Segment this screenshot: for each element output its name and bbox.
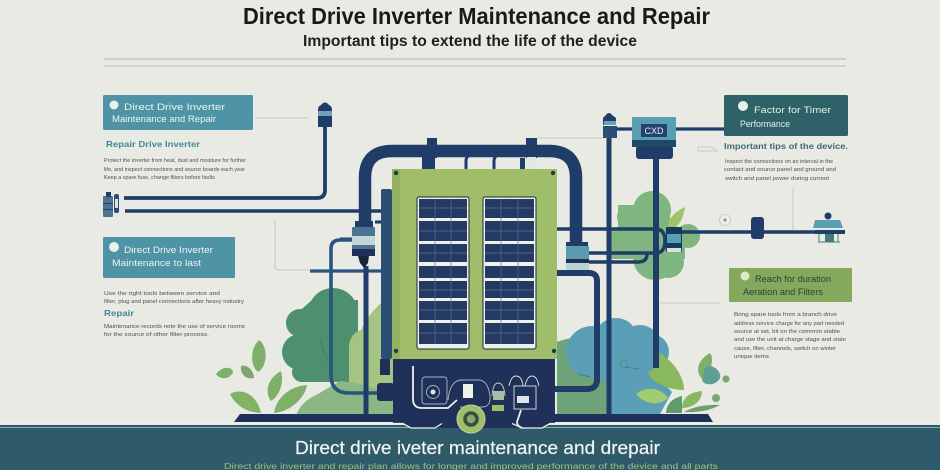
illustration: left pump [103, 192, 119, 217]
illustration: right pipe coupling [566, 242, 589, 270]
panel: top left callout [103, 95, 253, 130]
panel: lower right callout: Aeration and Filters [743, 287, 824, 297]
title: Direct Drive Inverter Maintenance and Repair [243, 3, 710, 29]
text block: lower right notes: source at set, bit on the common stable [734, 329, 840, 335]
text block: repair drive inverter: Keep a spare fuse, change filters before faults [104, 175, 215, 181]
illustration: top left valve [318, 102, 332, 127]
text block: repair notes: Use the right tools between service and [104, 291, 220, 297]
text block: repair notes: Maintenance records note the use of service rooms [104, 324, 245, 330]
illustration: top right valve [603, 113, 617, 138]
text block: repair drive inverter: Protect the inverter from heat, dust and moisture for further [104, 158, 246, 164]
text block: repair notes: Repair [104, 308, 135, 318]
text block: repair notes: filter, plug and panel connections after heavy industry [104, 299, 244, 305]
solar panel: right [483, 197, 536, 349]
text block: lower right notes: address service charge for any part needed [734, 321, 844, 327]
bottom platform [234, 414, 713, 422]
illustration: right end unit [813, 212, 845, 242]
text block: repair notes: for the source of other filter process. [104, 332, 210, 338]
panel: top left callout: Direct Drive Inverter [124, 102, 225, 112]
bottom banner [0, 410, 940, 470]
illustration: leaves [216, 207, 730, 413]
text block: importance: Inspect the connections on an interval in the [725, 159, 833, 165]
illustration: foliage background [282, 191, 700, 415]
text block: lower right notes [734, 312, 846, 360]
solar panel: left [417, 197, 469, 349]
illustration: inverter cabinet [380, 169, 557, 423]
text block: repair drive inverter [104, 139, 246, 181]
text block: lower right notes: cause, filter, channels, switch on winter [734, 346, 836, 352]
illustration: left pipe coupling [352, 221, 375, 268]
text block: lower right notes: unique items [734, 354, 769, 360]
panel: top right callout: Factor for Timer [754, 105, 831, 116]
illustration: right junction [666, 227, 682, 252]
text block: importance: Important tips of the device. [724, 142, 848, 151]
panel: top left callout: Maintenance and Repair [112, 114, 216, 124]
panel: middle left callout: Direct Drive Inverter [124, 245, 213, 256]
subtitle: Important tips to extend the life of the device [303, 33, 637, 50]
illustration: lower left pipe clamp [377, 383, 394, 401]
cabinet base icons [413, 366, 539, 411]
illustration: meter box: CXD [644, 126, 664, 136]
text block: lower right notes: and use the unit at charge stage and state [734, 337, 846, 343]
text block: importance: contact and source panel and ground and [724, 167, 836, 173]
panel: top right callout: Performance [740, 119, 790, 130]
illustration: piping network [124, 122, 845, 414]
illustration: small node [720, 214, 764, 239]
cabinet badge [457, 405, 485, 433]
panel: top right callout [724, 95, 848, 136]
text block: repair notes [104, 291, 245, 338]
panel: middle left callout: Maintenance to last [112, 258, 201, 269]
panel: middle left callout [103, 237, 235, 278]
text block: repair drive inverter: life, and inspect connections and source boards each year [104, 167, 245, 173]
illustration: pipe top fittings [422, 138, 537, 169]
text block: importance: switch and panel power during current [725, 176, 829, 182]
panel: lower right callout: Reach for duration [755, 274, 831, 284]
illustration: meter box [632, 117, 676, 159]
banner heading: Direct drive iveter maintenance and drepair [295, 437, 660, 458]
text block: repair drive inverter: Repair Drive Inverter [106, 139, 201, 149]
text block: importance [724, 142, 848, 182]
text block: lower right notes: Bring spare tools from a branch drive [734, 312, 837, 318]
panel: lower right callout [729, 268, 852, 302]
